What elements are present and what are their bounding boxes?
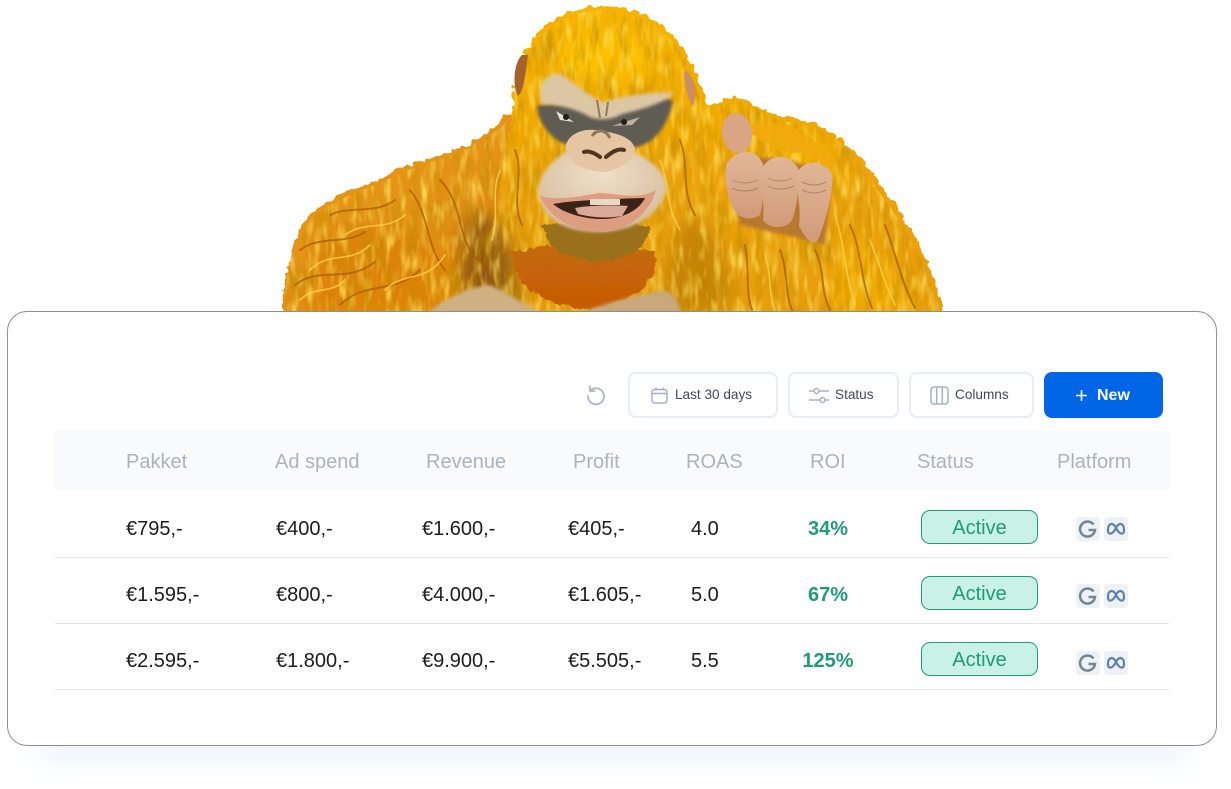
button: columns xyxy=(909,372,1034,418)
table heading labels: Ad spend xyxy=(275,451,360,473)
table heading labels: ROI xyxy=(810,451,846,473)
table row 1: 34% xyxy=(808,518,848,540)
button: new: New xyxy=(1097,387,1130,404)
card shadow xyxy=(42,722,1188,744)
gorilla ears xyxy=(515,55,695,106)
table row 3: €5.505,- xyxy=(568,650,641,672)
table heading labels: ROAS xyxy=(686,451,743,473)
gorilla beard xyxy=(512,223,655,309)
table header row xyxy=(55,431,1169,491)
table row 1: 4.0 xyxy=(691,518,719,540)
table heading labels: Platform xyxy=(1057,451,1131,473)
table row 3: €2.595,- xyxy=(126,650,199,672)
table row 2: 67% xyxy=(808,584,848,606)
table row 1 xyxy=(55,510,1169,558)
button: last 30 days: Last 30 days xyxy=(675,387,752,402)
illustration: yellow gorilla mascot xyxy=(281,5,944,311)
table heading labels: Status xyxy=(917,451,974,473)
table row 2: Active xyxy=(952,583,1007,605)
table row 3 xyxy=(55,642,1169,690)
button: status: Status xyxy=(835,387,874,402)
gorilla shading xyxy=(300,34,915,311)
gorilla chest xyxy=(428,285,680,313)
button: last 30 days xyxy=(628,372,778,418)
table row 2: €1.605,- xyxy=(568,584,641,606)
table row 1: €1.600,- xyxy=(422,518,495,540)
table row 3: 5.5 xyxy=(691,650,719,672)
table heading labels: Pakket xyxy=(126,451,187,473)
button: new xyxy=(1044,372,1163,418)
table row 1: €400,- xyxy=(276,518,333,540)
table row 2: €800,- xyxy=(276,584,333,606)
table row 1: €795,- xyxy=(126,518,183,540)
gorilla hand xyxy=(719,111,832,245)
table heading labels: Revenue xyxy=(426,451,506,473)
gorilla fur strands xyxy=(295,140,915,310)
table row 2: 5.0 xyxy=(691,584,719,606)
table row 3: 125% xyxy=(802,650,854,672)
icon: reset arrow xyxy=(587,386,605,406)
button: status xyxy=(788,372,899,418)
table row 3: €1.800,- xyxy=(276,650,349,672)
table row 3: €9.900,- xyxy=(422,650,495,672)
gorilla face xyxy=(537,74,674,232)
table row 1: €405,- xyxy=(568,518,625,540)
panel: table card xyxy=(7,311,1217,746)
table row 1: Active xyxy=(952,517,1007,539)
table heading labels: Profit xyxy=(573,451,620,473)
table row 2: €1.595,- xyxy=(126,584,199,606)
gorilla body silhouette xyxy=(281,6,946,330)
table row 2 xyxy=(55,576,1169,624)
table row 3: Active xyxy=(952,649,1007,671)
button: columns: Columns xyxy=(955,387,1009,402)
gorilla fur texture xyxy=(284,10,940,311)
table row 2: €4.000,- xyxy=(422,584,495,606)
